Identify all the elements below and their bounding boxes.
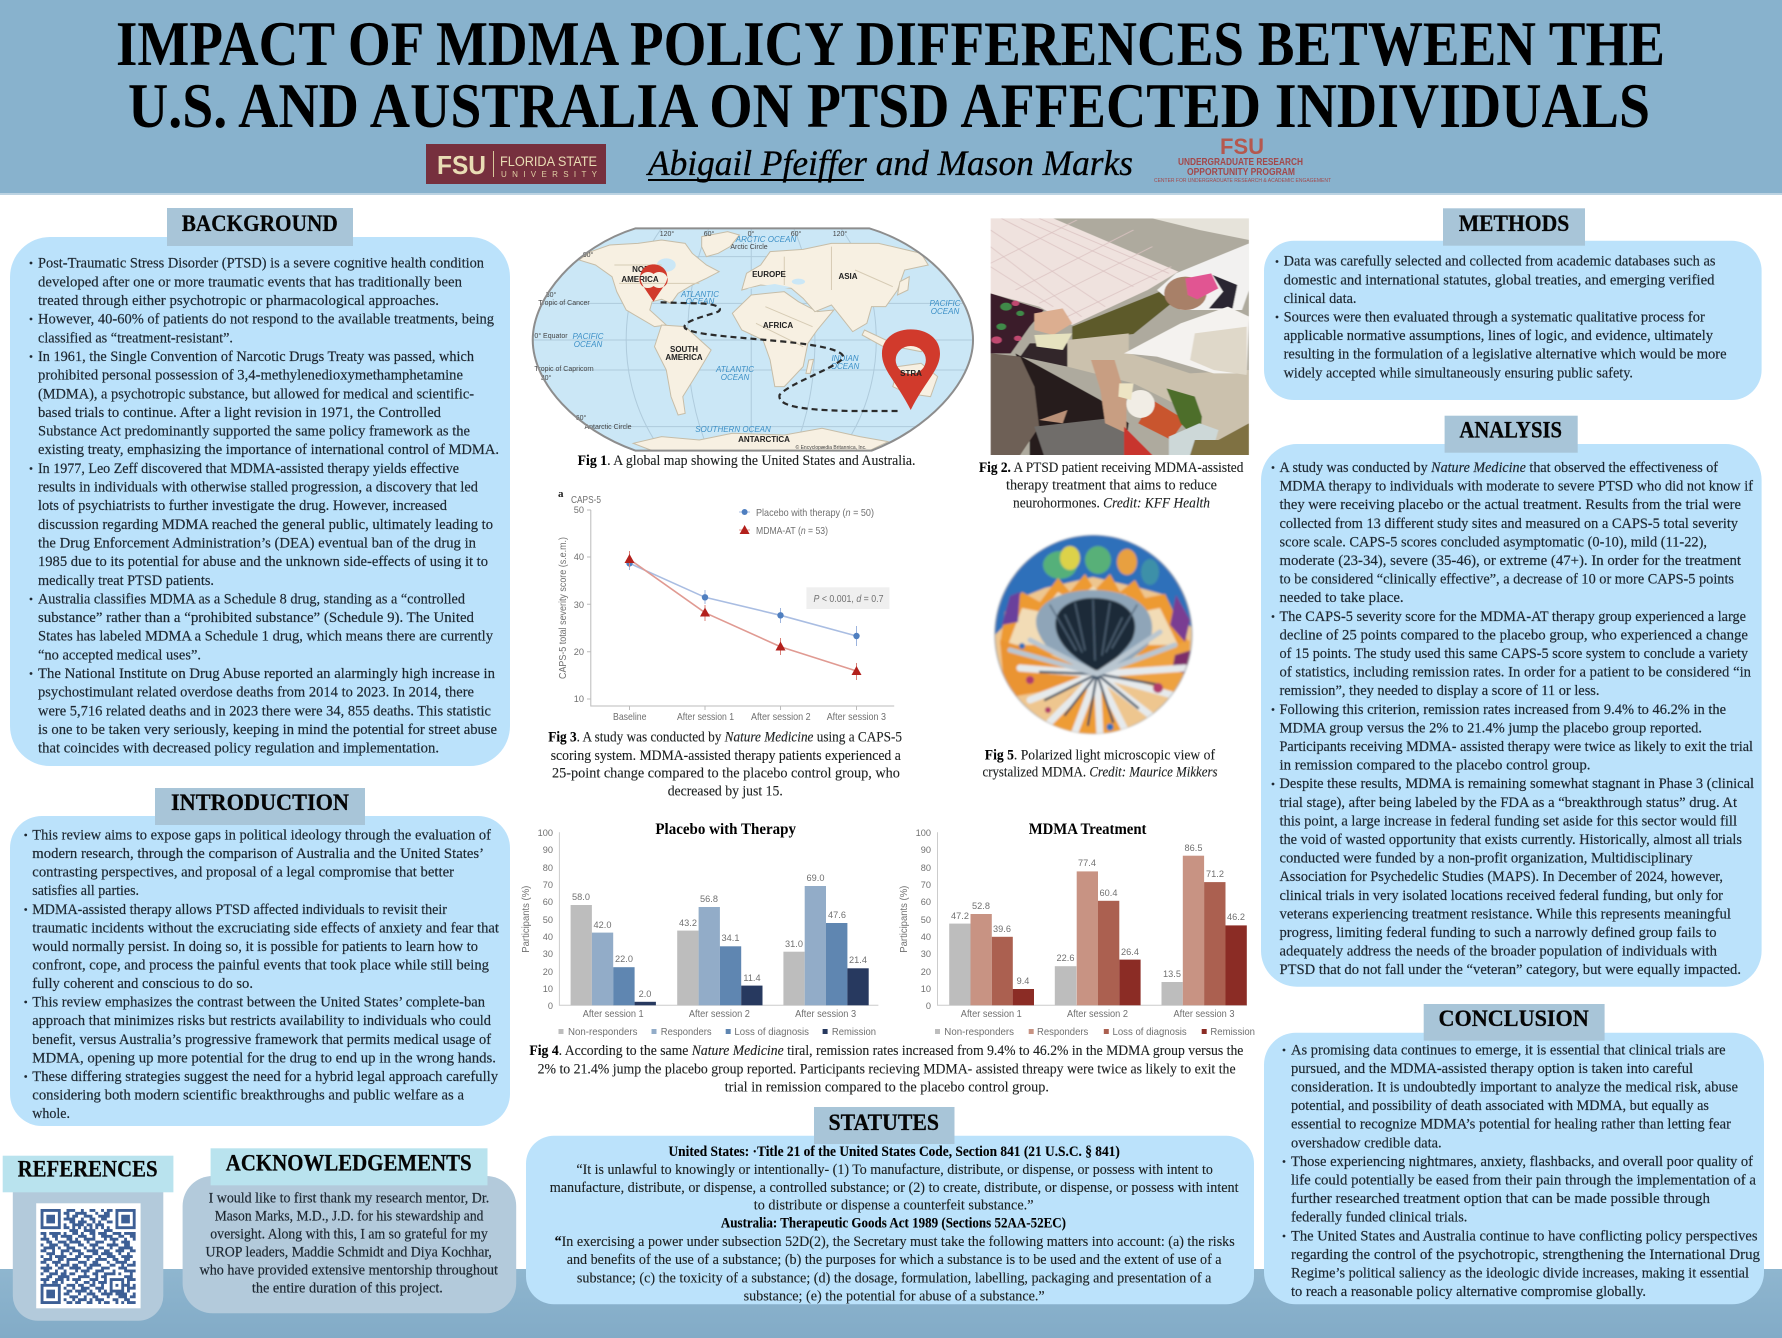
analysis text: moderate (23-34), severe (35-46), or extreme (47+). In order for the treatment: [1280, 553, 1741, 569]
figure 3: CAPS-5 line chart: CAPS-5 total severity score (s.e.m.): [557, 537, 569, 679]
figure 5: polarized light microscopy of crystallized MDMA: [990, 530, 1200, 740]
heading: references: REFERENCES: [18, 1157, 158, 1182]
background text: treated through either psychotropic or pharmacological approaches.: [38, 293, 439, 309]
heading: analysis: ANALYSIS: [1459, 418, 1562, 443]
figure 1: world map: OCEAN: [574, 340, 602, 349]
chart: placebo with therapy: 22.0: [615, 954, 633, 964]
heading: acknowledgements: [211, 1148, 488, 1185]
heading: analysis: [1445, 416, 1578, 453]
chart: MDMA treatment: 9.4: [1017, 976, 1029, 986]
introduction text: benefit, versus Australia’s progressive framework that permits medical usage of: [32, 1032, 491, 1048]
background text: [30, 256, 499, 757]
chart: MDMA treatment: After session 1: [961, 1008, 1022, 1020]
analysis text: veterans experiencing treatment resistance. While this represents meaningful: [1280, 906, 1731, 922]
acknowledgements text: who have provided extensive mentorship throughout: [200, 1263, 498, 1279]
conclusion text: essential to recognize MDMA’s potential for healing rather than letting fear: [1291, 1117, 1731, 1133]
analysis text: conducted were funded by a non-profit organization, Multidisciplinary: [1280, 851, 1693, 867]
figure 3: CAPS-5 line chart: 50: [574, 505, 584, 515]
conclusion text: consideration. It is undoubtedly important to analyze the medical risk, abuse: [1291, 1080, 1738, 1096]
chart: MDMA treatment: 20: [921, 967, 931, 977]
analysis text: clinical trials in very isolated locations received federal funding, but only for: [1280, 888, 1723, 904]
figure 1: world map: [520, 223, 992, 457]
background text: medically treat PTSD patients.: [38, 573, 214, 589]
logo: undergraduate research opportunity program: UNDERGRADUATE RESEARCH: [1178, 156, 1303, 168]
statutes text: “It is unlawful to knowingly or intentionally- (1) To manufacture, distribute, or dispense, or possess with intent to: [576, 1162, 1213, 1178]
background text: is one to be taken very seriously, keeping in mind the potential for street abuse: [38, 722, 497, 738]
heading: acknowledgements: ACKNOWLEDGEMENTS: [226, 1151, 472, 1176]
chart: placebo with therapy: 47.6: [828, 910, 846, 920]
chart: MDMA treatment: 50: [921, 915, 931, 925]
acknowledgements text: UROP leaders, Maddie Schmidt and Diya Kochhar,: [206, 1245, 492, 1261]
figure 3: CAPS-5 line chart: 30: [574, 600, 584, 610]
figure 1: world map: INDIAN: [831, 354, 859, 363]
figure 1: world map: EUROPE: [752, 270, 787, 279]
introduction text: contrasting perspectives, and proposal of a legal compromise that better: [32, 865, 454, 881]
figure 3: CAPS-5 line chart: 20: [574, 647, 584, 657]
statutes text: substance; (e) the potential for abuse of a substance.”: [744, 1289, 1045, 1305]
introduction text: traumatic incidents without the excruciating side effects of anxiety and fear that: [32, 920, 499, 936]
statutes text: Australia: Therapeutic Goods Act 1989 (Sections 52AA-52EC): [721, 1215, 1066, 1231]
analysis text: needed to take place.: [1280, 590, 1404, 606]
figure 1: world map: Arctic Circle: [730, 244, 768, 251]
figure 1: world map: AMERICA: [665, 353, 703, 362]
caption: figure 2: Fig 2. A PTSD patient receiving MDMA-assisted: [979, 460, 1244, 476]
analysis text: adequately address the needs of the broader population of individuals with: [1280, 944, 1718, 960]
chart: MDMA treatment: 100: [916, 828, 931, 838]
chart: placebo with therapy: 42.0: [594, 920, 611, 930]
figure 1: world map: 30°: [541, 374, 551, 382]
figure 1: world map: OCEAN: [721, 373, 749, 382]
QR code: [36, 1203, 141, 1308]
introduction text: These differing strategies suggest the need for a hybrid legal approach carefully: [32, 1069, 499, 1085]
heading: background: [167, 208, 353, 246]
chart: placebo with therapy: 90: [543, 845, 553, 855]
background text: substance” rather than a “prohibited substance” (Schedule 9). The United: [38, 610, 475, 626]
analysis text: [1272, 460, 1754, 978]
figure 1: world map: ASIA: [838, 272, 858, 281]
acknowledgements text: [200, 1191, 498, 1297]
caption: figure 4: Fig 4. According to the same Nature Medicine tiral, remission rates increased from 9.4% to 46.2% in the MDMA group versus the: [529, 1043, 1243, 1059]
chart: placebo with therapy: 100: [538, 828, 553, 838]
introduction text: This review emphasizes the contrast between the United States’ complete-ban: [32, 995, 486, 1011]
background text: Post-Traumatic Stress Disorder (PTSD) is a severe cognitive health condition: [38, 256, 485, 272]
background text: lots of psychiatrists to further investigate the drug. However, increased: [38, 498, 448, 514]
chart: placebo with therapy: 43.2: [679, 918, 697, 928]
background text: 1985 due to its potential for abuse and the unknown side-effects of using it to: [38, 554, 488, 570]
chart: MDMA treatment: [898, 821, 1255, 1038]
caption: figure 3: decreased by just 15.: [668, 784, 783, 800]
analysis text: A study was conducted by Nature Medicine that observed the effectiveness of: [1280, 460, 1718, 476]
heading: conclusion: CONCLUSION: [1438, 1006, 1589, 1031]
statutes text: “In exercising a power under subsection 52D(2), the Secretary must take the following matters into account: (a) the risks: [555, 1234, 1235, 1250]
caption: figure 4: 2% to 21.4% jump the placebo group reported. Participants recieving MDMA- assisted threapy were twice as likely to exit the: [538, 1061, 1236, 1077]
caption: figure 3: [548, 730, 902, 800]
figure 1: world map: OCEAN: [831, 362, 859, 371]
figure 3: CAPS-5 line chart: After session 1: [677, 711, 734, 723]
logo: Florida State University: FLORIDA STATE: [500, 153, 597, 169]
figure 1: world map: 60°: [791, 230, 801, 238]
figure 1: world map: ATLANTIC: [680, 290, 719, 299]
analysis text: this point, a large increase in federal funding set aside for this sector would fill: [1280, 813, 1737, 829]
conclusion text: regarding the control of the psychotropic, strengthening the International Drug: [1291, 1247, 1760, 1263]
introduction text: would normally persist. In doing so, it is possible for patients to learn how to: [32, 939, 478, 955]
figure 1: world map: Antarctic Circle: [584, 424, 632, 431]
chart: MDMA treatment: 46.2: [1227, 912, 1245, 922]
methods text: Sources were then evaluated through a systematic qualitative process for: [1284, 310, 1705, 326]
legend: Placebo with therapy (n = 50): [756, 507, 874, 519]
figure 1: world map: 60°: [704, 230, 714, 238]
background text: existing treaty, emphasizing the importance of international control of MDMA.: [38, 442, 499, 458]
conclusion text: Regime’s political saliency as the ideologic divide increases, making it essential: [1291, 1266, 1749, 1282]
methods text: domestic and international statutes, global treaties, and emerging verified: [1284, 272, 1715, 288]
heading: introduction: [155, 788, 365, 825]
introduction text: [24, 828, 499, 1122]
heading: statutes: STATUTES: [828, 1110, 939, 1135]
heading: introduction: INTRODUCTION: [171, 790, 349, 815]
caption: figure 2: [979, 460, 1244, 512]
significance box: P < 0.001, d = 0.7: [814, 593, 884, 605]
analysis text: of statistics, including remission rates. In order for a patient to be considered “in: [1280, 665, 1752, 681]
statutes text: [550, 1144, 1239, 1305]
figure 1: world map: PACIFIC: [930, 299, 961, 308]
figure 1: world map: Tropic of Cancer: [538, 300, 590, 307]
chart: placebo with therapy: 34.1: [722, 933, 739, 943]
background text: Australia classifies MDMA as a Schedule 8 drug, standing as a “controlled: [38, 591, 466, 607]
chart: placebo with therapy: [520, 821, 878, 1038]
panel: statutes: [526, 1107, 1254, 1305]
analysis text: Participants receiving MDMA- assisted therapy were twice as likely to exit the trial: [1280, 739, 1753, 755]
chart: placebo with therapy: 30: [543, 949, 553, 959]
chart: MDMA treatment: 26.4: [1121, 947, 1139, 957]
figure 1: world map: 0°: [748, 230, 755, 238]
chart: MDMA treatment: 60.4: [1100, 888, 1117, 898]
heading: methods: [1443, 208, 1585, 246]
figure 1: world map: NOR: [632, 265, 650, 274]
introduction text: considering both modern scientific breakthroughs and public welfare as a: [32, 1088, 465, 1104]
analysis text: to be considered “clinically effective”, a decrease of 10 or more CAPS-5 points: [1280, 572, 1734, 588]
analysis text: the void of wasted opportunity that exists currently. Historically, almost all trials: [1280, 832, 1742, 848]
caption: figure 5: Fig 5. Polarized light microscopic view of: [985, 747, 1215, 763]
legend: MDMA: Remission: [1210, 1026, 1255, 1038]
background text: were 5,716 related deaths and in 2023 there were 34, 855 deaths. This statistic: [38, 703, 491, 719]
panel: introduction: [10, 788, 510, 1126]
chart: placebo with therapy: 10: [543, 984, 553, 994]
caption: figure 2: neurohormones. Credit: KFF Health: [1013, 496, 1210, 512]
methods text: Data was carefully selected and collected from academic databases such as: [1284, 254, 1716, 270]
panel: background: [10, 208, 510, 766]
chart: MDMA treatment: After session 2: [1067, 1008, 1128, 1020]
footer band: [0, 1269, 1782, 1338]
statutes text: United States: ·Title 21 of the United States Code, Section 841 (21 U.S.C. § 841): [668, 1144, 1120, 1160]
background text: that coincides with decreased policy regulation and implementation.: [38, 741, 439, 757]
legend: MDMA: Non-responders: [944, 1026, 1014, 1038]
heading: statutes: [814, 1107, 954, 1144]
chart: placebo with therapy: 60: [543, 897, 553, 907]
background text: However, 40-60% of patients do not respond to the available treatments, being: [38, 312, 494, 328]
chart: MDMA treatment: 47.2: [951, 911, 969, 921]
background text: developed after one or more traumatic events that has traditionally been: [38, 274, 463, 290]
background text: The National Institute on Drug Abuse reported an alarmingly high increase in: [38, 666, 496, 682]
methods text: widely accepted while simultaneously ensuring public safety.: [1284, 365, 1633, 381]
legend: MDMA-AT (n = 53): [756, 525, 828, 537]
acknowledgements text: the entire duration of this project.: [252, 1281, 443, 1297]
figure 1: world map: 60°: [576, 414, 586, 422]
analysis text: trial stage), after being labeled by the FDA as a “breakthrough status” drug. At: [1280, 795, 1737, 811]
analysis text: Following this criterion, remission rates increased from 9.4% to 46.2% in the: [1280, 702, 1726, 718]
conclusion text: further researched treatment option that can be made possible through: [1291, 1191, 1711, 1207]
conclusion text: to reach a reasonable policy alternative compromise globally.: [1291, 1284, 1646, 1300]
figure 1: world map: Tropic of Capricorn: [534, 366, 594, 373]
figure 3: CAPS-5 line chart: 40: [574, 552, 584, 562]
figure 1: world map: 60°: [583, 251, 593, 259]
bars: placebo: [571, 886, 869, 1005]
chart: placebo with therapy: 56.8: [700, 894, 718, 904]
chart: MDMA treatment: 40: [921, 932, 931, 942]
analysis text: The CAPS-5 severity score for the MDMA-AT therapy group experienced a large: [1280, 609, 1746, 625]
chart: MDMA treatment: 13.5: [1163, 969, 1181, 979]
analysis text: of 15 points. The study used this same CAPS-5 score system to conclude a variety: [1280, 646, 1749, 662]
MDMA series: [624, 551, 862, 680]
title: [116, 8, 1665, 141]
statutes text: manufacture, distribute, or dispense, a controlled substance; or (2) to create, distribute, or dispense, or possess with intent: [550, 1180, 1239, 1196]
chart: MDMA treatment: 10: [921, 984, 931, 994]
panel: references: [3, 1156, 173, 1321]
chart: MDMA treatment: Participants (%): [898, 886, 910, 953]
figure 1: world map: SOUTHERN OCEAN: [695, 425, 771, 434]
legend: MDMA: Loss of diagnosis: [1112, 1026, 1187, 1038]
chart title: MDMA: MDMA Treatment: [1029, 821, 1147, 838]
chart: MDMA treatment: 80: [921, 863, 931, 873]
analysis text: PTSD that do not fall under the “veteran” category, but were equally impacted.: [1280, 962, 1741, 978]
background text: In 1961, the Single Convention of Narcotic Drugs Treaty was passed, which: [38, 349, 475, 365]
introduction text: MDMA-assisted therapy allows PTSD affected individuals to revisit their: [32, 902, 447, 918]
background text: Substance Act predominantly supported the same policy framework as the: [38, 424, 470, 440]
panel: methods: [1264, 208, 1762, 400]
logo: Florida State University: [426, 144, 606, 184]
acknowledgements text: I would like to first thank my research mentor, Dr.: [209, 1191, 489, 1207]
figure 1: world map: ARCTIC OCEAN: [735, 235, 796, 244]
background text: results in individuals with otherwise stalled progression, a discovery that led: [38, 480, 479, 496]
introduction text: modern research, through the comparison of Australia and the United States’: [32, 846, 484, 862]
figure 1: world map: OCEAN: [686, 297, 714, 306]
background text: States has labeled MDMA a Schedule 1 drug, which means there are currently: [38, 629, 494, 645]
analysis text: decline of 25 points compared to the placebo group, who experienced a change: [1280, 627, 1748, 643]
figure 1: world map: STRA: [900, 369, 922, 378]
logo: undergraduate research opportunity program: [1154, 134, 1331, 184]
figure 1: world map: 120°: [833, 230, 847, 238]
legend: MDMA: [935, 1026, 1255, 1038]
logo: undergraduate research opportunity program: FSU: [1220, 134, 1264, 159]
conclusion text: federally funded clinical trials.: [1291, 1210, 1467, 1226]
title banner: [0, 0, 1782, 195]
analysis text: MDMA group versus the 2% to 21.4% jump the placebo group reported.: [1280, 720, 1702, 736]
figure 1: world map: SOUTH: [670, 345, 698, 354]
figure 3: CAPS-5 line chart: After session 2: [751, 711, 811, 723]
figure 1: world map: 30°: [546, 291, 556, 299]
conclusion text: Those experiencing nightmares, anxiety, flashbacks, and overall poor quality of: [1291, 1154, 1753, 1170]
figure 1: world map: 120°: [660, 230, 674, 238]
conclusion text: potential, and possibility of death associated with MDMA, but equally as: [1291, 1098, 1709, 1114]
chart: MDMA treatment: 60: [921, 897, 931, 907]
chart: placebo with therapy: 58.0: [572, 892, 590, 902]
figure 3: CAPS-5 line chart: [557, 488, 894, 723]
introduction text: approach that minimizes risks but restricts availability to individuals who could: [32, 1013, 492, 1029]
figure 1: world map: AMERICA: [621, 275, 659, 284]
figure 1: world map: 0° Equator: [534, 332, 568, 340]
chart: placebo with therapy: Participants (%): [520, 886, 532, 953]
introduction text: whole.: [32, 1106, 70, 1122]
conclusion text: overshadow credible data.: [1291, 1135, 1442, 1151]
figure 3: CAPS-5 line chart: a: [558, 488, 564, 500]
acknowledgements text: Mason Marks, M.D., J.D. for his stewardship and: [215, 1209, 484, 1225]
figure 3: CAPS-5 line chart: CAPS-5: [571, 494, 601, 506]
analysis text: progress, limiting federal funding to such a narrowly defined group fails to: [1280, 925, 1716, 941]
heading: conclusion: [1424, 1004, 1605, 1041]
chart: placebo with therapy: 0: [548, 1001, 553, 1011]
background text: In 1977, Leo Zeff discovered that MDMA-assisted therapy yields effective: [38, 461, 459, 477]
conclusion text: [1283, 1042, 1760, 1300]
caption: figure 5: [982, 747, 1218, 781]
chart: placebo with therapy: 31.0: [785, 939, 803, 949]
caption: figure 1: Fig 1. A global map showing the United States and Australia.: [578, 453, 916, 469]
introduction text: confront, cope, and process the painful events that took place while still being: [32, 958, 489, 974]
chart: MDMA treatment: 70: [921, 880, 931, 890]
caption: figure 4: [529, 1043, 1243, 1096]
chart: placebo with therapy: 11.4: [743, 973, 761, 983]
logo: undergraduate research opportunity program: CENTER FOR UNDERGRADUATE RESEARCH & ACADEMIC ENGAGEMENT: [1154, 178, 1331, 184]
figure 1: world map: © Encyclopædia Britannica, Inc.: [796, 444, 866, 451]
analysis text: collected from 13 different study sites and measured on a CAPS-5 total severity: [1280, 516, 1739, 532]
analysis text: Despite these results, MDMA is remaining somewhat stagnant in Phase 3 (clinical: [1280, 776, 1754, 792]
methods text: clinical data.: [1284, 291, 1356, 307]
introduction text: satisfies all parties.: [32, 883, 139, 899]
methods text: [1276, 254, 1727, 381]
authors: Abigail Pfeiffer and Mason Marks: [646, 143, 1133, 183]
conclusion text: The United States and Australia continue to have conflicting policy perspectives: [1291, 1228, 1758, 1244]
legend: placebo: Remission: [832, 1026, 876, 1038]
chart: MDMA treatment: 39.6: [993, 924, 1011, 934]
background text: classified as “treatment-resistant”.: [38, 330, 233, 346]
panel: acknowledgements: [183, 1148, 516, 1313]
chart: placebo with therapy: After session 3: [795, 1008, 856, 1020]
background text: (MDMA), a psychotropic substance, but allowed for medical and scientific-: [38, 386, 474, 402]
significance box: [806, 587, 889, 609]
analysis text: in remission compared to the placebo control group.: [1280, 758, 1590, 774]
conclusion text: pursued, and the MDMA-assisted therapy option is taken into careful: [1291, 1061, 1693, 1077]
background text: discussion regarding MDMA reached the general public, ultimately leading to: [38, 517, 493, 533]
statutes text: and benefits of the use of a substance; (b) the purposes for which a substance is to be used and the extent of use of a: [567, 1252, 1222, 1268]
legend: [739, 507, 874, 537]
legend: MDMA: Responders: [1037, 1026, 1088, 1038]
figure 3: CAPS-5 line chart: Baseline: [613, 711, 647, 723]
figure 1: world map: OCEAN: [931, 307, 959, 316]
analysis text: score scale. CAPS-5 scores concluded asymptomatic (0-10), mild (11-22),: [1280, 534, 1707, 550]
figure 3: CAPS-5 line chart: 10: [574, 694, 584, 704]
chart: placebo with therapy: After session 1: [583, 1008, 644, 1020]
chart: placebo with therapy: 50: [543, 915, 553, 925]
statutes text: to distribute or dispense a counterfeit substance.”: [754, 1197, 1034, 1213]
background text: based trials to continue. After a light revision in 1971, the Controlled: [38, 405, 442, 421]
bars: MDMA: [949, 856, 1247, 1005]
statutes text: substance; (c) the toxicity of a substance; (d) the dosage, formulation, labelling, packaging and presentation of a: [577, 1271, 1212, 1287]
caption: figure 4: trial in remission compared to the placebo control group.: [725, 1080, 1049, 1096]
introduction text: fully coherent and conscious to do so.: [32, 976, 253, 992]
figure 2: photo of PTSD patient receiving therapy: [990, 218, 1249, 455]
legend: placebo: Loss of diagnosis: [734, 1026, 809, 1038]
legend: placebo: [558, 1026, 876, 1038]
background text: the Drug Enforcement Administration’s (DEA) eventual ban of the drug in: [38, 535, 477, 551]
chart: MDMA treatment: 71.2: [1206, 869, 1224, 879]
chart: placebo with therapy: After session 2: [689, 1008, 750, 1020]
chart: MDMA treatment: 30: [921, 949, 931, 959]
caption: figure 2: therapy treatment that aims to reduce: [1006, 478, 1217, 494]
analysis text: MDMA therapy to individuals with moderate to severe PTSD who did not know if: [1280, 479, 1753, 495]
methods text: resulting in the formulation of a legislative alternative which would be more: [1284, 347, 1727, 363]
logo: undergraduate research opportunity program: OPPORTUNITY PROGRAM: [1187, 166, 1295, 178]
caption: figure 5: crystalized MDMA. Credit: Maurice Mikkers: [982, 765, 1218, 781]
chart: placebo with therapy: 40: [543, 932, 553, 942]
panel: analysis: [1261, 416, 1762, 987]
caption: figure 3: scoring system. MDMA-assisted therapy patients experienced a: [551, 748, 901, 764]
analysis text: remission”, they needed to display a score of 11 or less.: [1280, 683, 1600, 699]
chart: placebo with therapy: 20: [543, 967, 553, 977]
chart: MDMA treatment: 77.4: [1078, 858, 1096, 868]
heading: background: BACKGROUND: [182, 211, 338, 236]
chart: placebo with therapy: 80: [543, 863, 553, 873]
background text: prohibited personal possession of 3,4-methylenedioxymethamphetamine: [38, 368, 463, 384]
logo: Florida State University: UNIVERSITY: [501, 170, 598, 179]
chart: MDMA treatment: 90: [921, 845, 931, 855]
heading: references: [3, 1156, 173, 1192]
conclusion text: As promising data continues to emerge, it is essential that clinical trials are: [1291, 1042, 1726, 1058]
chart: MDMA treatment: 52.8: [972, 901, 990, 911]
placebo series: [626, 556, 860, 646]
panel: conclusion: [1264, 1004, 1764, 1304]
chart: MDMA treatment: 22.6: [1057, 953, 1074, 963]
caption: figure 3: 25-point change compared to the placebo control group, who: [552, 766, 900, 782]
chart title: placebo: Placebo with Therapy: [655, 821, 796, 838]
figure 3: CAPS-5 line chart: After session 3: [827, 711, 886, 723]
figure 1: world map: ATLANTIC: [715, 365, 754, 374]
chart: MDMA treatment: 0: [926, 1001, 931, 1011]
conclusion text: life could potentially be eased from their pain through the implementation of a: [1291, 1172, 1757, 1188]
chart: placebo with therapy: 2.0: [639, 989, 651, 999]
figure 1: world map: ANTARCTICA: [738, 435, 790, 444]
chart: placebo with therapy: 21.4: [849, 955, 867, 965]
legend: placebo: Non-responders: [568, 1026, 638, 1038]
legend: placebo: Responders: [661, 1026, 712, 1038]
methods text: applicable normative assumptions, lines of logic, and evidence, ultimately: [1284, 328, 1714, 344]
introduction text: MDMA, opening up more potential for the drug to end up in the wrong hands.: [32, 1050, 496, 1066]
chart: placebo with therapy: 69.0: [807, 873, 824, 883]
figure 1: world map: PACIFIC: [573, 332, 604, 341]
figure 1: world map: AFRICA: [763, 321, 793, 330]
analysis text: Association for Psychedelic Studies (MAPS). In December of 2024, however,: [1280, 869, 1723, 885]
caption: figure 3: Fig 3. A study was conducted by Nature Medicine using a CAPS-5: [548, 730, 902, 746]
introduction text: This review aims to expose gaps in political ideology through the evaluation of: [32, 828, 491, 844]
background text: psychostimulant related overdose deaths from 2014 to 2023. In 2014, there: [38, 685, 474, 701]
chart: MDMA treatment: 86.5: [1185, 843, 1202, 853]
chart: MDMA treatment: After session 3: [1174, 1008, 1235, 1020]
acknowledgements text: oversight. Along with this, I am so grateful for my: [210, 1227, 489, 1243]
analysis text: they were receiving placebo or the actual treatment. Results from the trial were: [1280, 497, 1741, 513]
chart: placebo with therapy: 70: [543, 880, 553, 890]
background text: “no accepted medical uses”.: [38, 647, 201, 663]
logo: Florida State University: FSU: [437, 150, 486, 180]
heading: methods: METHODS: [1459, 211, 1569, 236]
